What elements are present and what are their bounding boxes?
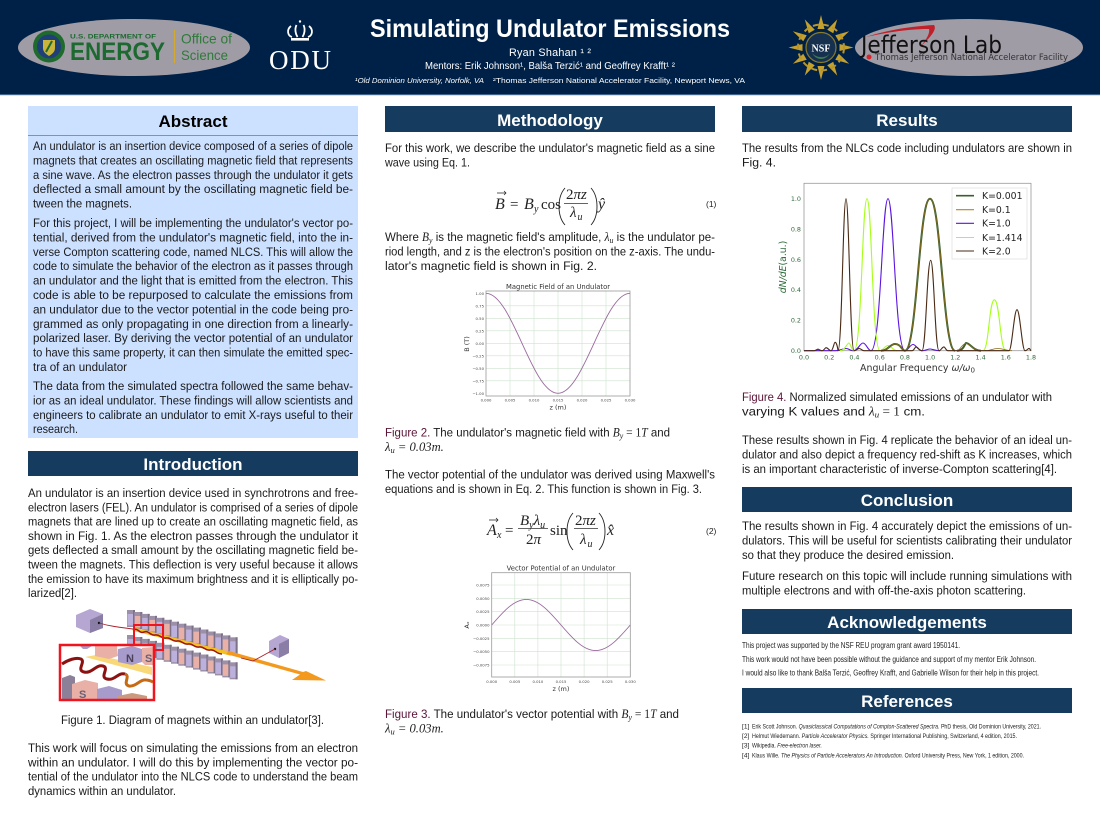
caption: figure 3: λ bbox=[385, 722, 390, 736]
text block: reference list: [2] bbox=[742, 733, 749, 740]
chart: magnetic field: 0.00 bbox=[476, 341, 485, 346]
equation 2: y bbox=[528, 520, 534, 531]
equation 1 bbox=[495, 187, 717, 225]
chart: magnetic field: −1.00 bbox=[472, 391, 485, 396]
chart: vector potential: 0.020 bbox=[579, 679, 590, 684]
text block: introduction body: shown in Fig. 1. As the electron passes through the undulator it bbox=[28, 529, 359, 543]
chart: magnetic field: 0.020 bbox=[577, 398, 588, 402]
y axis label: dN/dE(a.u.) bbox=[778, 241, 789, 293]
chart: magnetic field: z (m) bbox=[550, 404, 566, 412]
text block: introduction body bbox=[28, 486, 359, 600]
text block: undulator parameters: riod length, and z is the electron's position on the z-axis. The undu- bbox=[385, 244, 715, 258]
x ticks: 0.2 bbox=[824, 354, 834, 362]
caption: figure 3: y bbox=[628, 712, 632, 722]
text block: reference list: Helmut Wiedemann. Particle Accelerator Physics. Springer International Publishing, Switzerland, 4 edition, 2015. bbox=[752, 733, 1017, 740]
text block: conclusion body: multiple electrons and with off-the-axis photon scattering. bbox=[742, 583, 1026, 597]
legend bbox=[952, 188, 1027, 259]
text block: reference list: Klaus Wille. The Physics of Particle Accelerators An Introduction. Oxford University Press, New York, 1 edition, 2000. bbox=[752, 752, 1024, 760]
caption: figure 2: Figure 2. The undulator's magnetic field with B bbox=[385, 425, 624, 439]
text block: abstract body: tential, derived from the undulator's magnetic field, into the in- bbox=[33, 230, 353, 244]
text block: acknowledgements body bbox=[742, 640, 1039, 678]
text block: reference list: Erik Scott Johnson. Quasiclassical Computations of Compton-Scattered Spectra. PhD thesis, Old Dominion University, 2021. bbox=[752, 724, 1041, 730]
caption: figure 2: = 1 bbox=[623, 425, 641, 439]
chart: vector potential: Aₓ bbox=[463, 621, 471, 629]
text block: abstract body: magnets that creates an oscillating magnetic field that represents bbox=[33, 153, 353, 167]
x ticks: 0.0 bbox=[799, 354, 809, 362]
text block: conclusion body bbox=[742, 519, 1072, 597]
chart: vector potential: 0.000 bbox=[486, 679, 498, 684]
text block: undulator parameters: λ bbox=[604, 230, 610, 244]
legend: K=0.001 bbox=[982, 191, 1023, 202]
panel: results bbox=[742, 106, 1072, 476]
text block: methodology intro bbox=[384, 141, 715, 170]
equation 2: B bbox=[520, 513, 529, 529]
caption: figure 2: m. bbox=[432, 440, 444, 454]
equation 2: x bbox=[496, 530, 502, 541]
text block: abstract body: an undulator and the light that is emitted from the electron. This bbox=[33, 274, 353, 288]
text block: introduction body: magnets that are lined up to create an oscillating magnetic field, as bbox=[28, 515, 358, 529]
text block: undulator parameters: Where B bbox=[385, 230, 430, 244]
equation 1: u bbox=[578, 212, 582, 223]
text block: abstract body bbox=[33, 139, 353, 436]
logo: Jefferson Lab bbox=[855, 19, 1083, 76]
logo: Department of Energy Office of Science: U.S. DEPARTMENT OF bbox=[70, 34, 156, 40]
text block: results discussion: dulator and also depict a frequency red-shift as K increases, which bbox=[742, 447, 1072, 461]
y ticks: 0.2 bbox=[791, 317, 801, 325]
zoom inset: N bbox=[126, 653, 134, 665]
heading: acknowledgements bbox=[742, 609, 1072, 634]
caption: figure 3: = 1 bbox=[632, 707, 650, 721]
chart: vector potential: 0.005 bbox=[509, 679, 521, 684]
legend: K=1.414 bbox=[982, 233, 1023, 244]
chart: magnetic field: −0.50 bbox=[472, 366, 485, 371]
equation 1: λ bbox=[569, 205, 577, 221]
chart: magnetic field: −0.25 bbox=[472, 354, 485, 358]
logo: Department of Energy Office of Science bbox=[18, 19, 250, 76]
chart: magnetic field: 0.015 bbox=[553, 398, 564, 402]
curve: K=0.001 bbox=[881, 199, 981, 351]
chart: magnetic field: −0.75 bbox=[472, 378, 485, 384]
y ticks: 1.0 bbox=[791, 195, 801, 203]
text block: introduction body: electron lasers (FEL). An undulator is comprised of a series of dipole bbox=[28, 500, 358, 514]
text block: undulator parameters: y bbox=[428, 235, 433, 245]
equation 2: = bbox=[505, 523, 513, 539]
equation 1: = bbox=[510, 197, 518, 213]
text block: results discussion: These results shown in Fig. 4 replicate the behavior of an ideal un- bbox=[742, 433, 1072, 447]
caption: figure 4: varying K values and λ bbox=[742, 404, 874, 418]
equation 2: sin bbox=[550, 523, 568, 539]
chart: vector potential: 0.025 bbox=[602, 679, 613, 684]
heading: methodology: Methodology bbox=[497, 111, 603, 130]
x ticks: 1.2 bbox=[950, 354, 960, 362]
text block: abstract body: an undulator due to the vector potential in the code being pro- bbox=[33, 302, 353, 316]
text block: abstract body: to have this same property, it can then simulate the emitted spec- bbox=[33, 346, 353, 360]
grid lines bbox=[492, 573, 630, 677]
heading: references: References bbox=[861, 692, 953, 711]
chart: magnetic field: 0.005 bbox=[505, 398, 516, 402]
upper magnet row bbox=[127, 610, 238, 654]
chart: vector potential: 0.0000 bbox=[476, 622, 490, 628]
chart: magnetic field: 0.000 bbox=[481, 398, 492, 402]
mentors: Mentors: Erik Johnson¹, Balša Terzić¹ and Geoffrey Krafft¹ ² bbox=[425, 61, 676, 72]
caption: figure 2: λ bbox=[385, 440, 390, 454]
legend: K=1.0 bbox=[982, 219, 1011, 230]
curve: K=2.0 bbox=[804, 199, 1031, 351]
text block: conclusion body: The results shown in Fig. 4 accurately depict the emissions of un- bbox=[742, 519, 1072, 533]
author: Ryan Shahan ¹ ² bbox=[509, 47, 591, 59]
logo: Department of Energy Office of Science: Science bbox=[181, 47, 228, 63]
caption: figure 3: m. bbox=[432, 722, 444, 736]
legend: K=2.0 bbox=[982, 246, 1011, 257]
text block: vector potential: The vector potential of the undulator was derived using Maxwell's bbox=[385, 468, 715, 482]
caption: figure 3 bbox=[384, 707, 679, 736]
zoom frame: small bbox=[134, 625, 163, 650]
y ticks: 0.6 bbox=[791, 256, 801, 264]
zoom inset: S bbox=[145, 653, 152, 665]
chart: vector potential: 0.030 bbox=[625, 679, 636, 684]
grid lines bbox=[486, 291, 630, 396]
curve: K=1.414 bbox=[840, 199, 1006, 351]
y ticks: 0.0 bbox=[791, 347, 801, 355]
text block: abstract body: tween the magnets. bbox=[33, 197, 132, 211]
heading: abstract: Abstract bbox=[159, 112, 228, 131]
affiliations: ²Thomas Jefferson National Accelerator Facility, Newport News, VA bbox=[493, 76, 745, 85]
text block: abstract body: grammed as only propagating in one direction from a linearly- bbox=[33, 317, 353, 331]
heading: methodology bbox=[385, 106, 715, 132]
caption: figure 2: = 0.03 bbox=[395, 440, 432, 454]
legend: K=0.1 bbox=[982, 205, 1011, 216]
logo: Jefferson Lab: Thomas Jefferson National Accelerator Facility bbox=[874, 53, 1068, 63]
heading: introduction bbox=[28, 451, 358, 476]
text block: scope of work: within an undulator. I will do this by implementing the vector po- bbox=[27, 755, 358, 769]
caption: figure 3: = 0.03 bbox=[395, 722, 432, 736]
text block: vector potential bbox=[385, 468, 715, 496]
x ticks: 0.8 bbox=[900, 354, 910, 362]
logo: ODU bbox=[269, 20, 331, 75]
caption: figure 4: cm. bbox=[903, 404, 923, 418]
text block: abstract body: The data from the simulated spectra followed the same behav- bbox=[33, 379, 353, 393]
text block: conclusion body: dulators. This will be useful for scientists calibrating their undulator bbox=[742, 533, 1072, 547]
heading: conclusion bbox=[742, 487, 1072, 512]
heading: references bbox=[742, 688, 1072, 713]
text block: reference list bbox=[742, 724, 1041, 760]
y ticks: 0.4 bbox=[791, 286, 801, 294]
heading: results bbox=[742, 106, 1072, 132]
text block: undulator parameters: is the undulator pe- bbox=[613, 230, 715, 244]
caption: figure 2: T and bbox=[641, 425, 672, 439]
text block: conclusion body: so that they produce the desired emission. bbox=[742, 548, 954, 562]
text block: acknowledgements body: This project was supported by the NSF REU program grant award 1950141. bbox=[742, 640, 960, 650]
x axis label: 0 bbox=[970, 366, 975, 374]
logo: NSF bbox=[788, 15, 854, 80]
text block: methodology intro: For this work, we describe the undulator's magnetic field as a sine bbox=[385, 141, 715, 155]
text block: results discussion: is an important characteristic of inverse-Compton scattering[4]. bbox=[742, 462, 1057, 476]
x axis label: Angular Frequency ω/ω bbox=[860, 363, 970, 374]
text block: results discussion bbox=[742, 433, 1072, 476]
chart: vector potential: −0.0025 bbox=[473, 636, 490, 641]
logo: NSF: NSF bbox=[812, 44, 830, 54]
text block: undulator parameters: lator's magnetic field is shown in Fig. 2. bbox=[385, 259, 597, 273]
heading: acknowledgements: Acknowledgements bbox=[827, 613, 987, 632]
lower magnet row bbox=[127, 635, 238, 679]
heading: results: Results bbox=[876, 111, 938, 130]
chart: magnetic field: Magnetic Field of an Undulator bbox=[506, 283, 610, 291]
x ticks: 1.0 bbox=[925, 354, 935, 362]
chart: vector potential: 0.0050 bbox=[476, 596, 490, 601]
caption: figure 1: Figure 1. Diagram of magnets within an undulator[3]. bbox=[61, 713, 324, 727]
equation 1: y bbox=[533, 204, 539, 215]
caption: figure 4: u bbox=[875, 409, 879, 419]
icon: right cube bbox=[241, 635, 289, 661]
text block: reference list: [1] bbox=[742, 724, 749, 730]
caption: figure 4: = 1 bbox=[879, 404, 900, 418]
curve: K=0.1 bbox=[881, 199, 1012, 351]
text block: undulator parameters bbox=[385, 230, 715, 273]
equation 2: (2) bbox=[706, 526, 717, 536]
text block: reference list: [3] bbox=[742, 742, 749, 750]
chart: vector potential: 0.010 bbox=[532, 679, 544, 684]
caption: figure 2 bbox=[384, 425, 670, 455]
text block: scope of work: This work will focus on simulating the emissions from an electron bbox=[28, 741, 358, 755]
text block: abstract body: research. bbox=[33, 422, 78, 436]
text block: reference list: [4] bbox=[742, 752, 749, 760]
text block: introduction body: gets deflected a small amount by the oscillating magnetic field be- bbox=[28, 543, 358, 557]
equation 2: u bbox=[588, 539, 592, 550]
chart: vector potential bbox=[463, 564, 636, 693]
equation 2: 2πz bbox=[575, 513, 596, 529]
curve: K=1.0 bbox=[804, 199, 940, 351]
text block: undulator parameters: is the magnetic field's amplitude, bbox=[433, 230, 605, 244]
caption: figure 2: u bbox=[390, 445, 395, 455]
equation 1: (1) bbox=[706, 199, 717, 209]
equation 2: x̂ bbox=[606, 522, 614, 539]
chart: vector potential: −0.0075 bbox=[473, 662, 490, 668]
text block: reference list: Wikipedia. Free-electron laser. bbox=[752, 742, 822, 750]
equation 2: λ bbox=[533, 513, 541, 529]
x ticks bbox=[799, 354, 1036, 362]
text block: abstract body: polarized laser. By deriving the vector potential of an undulator bbox=[33, 331, 353, 345]
logo: Department of Energy Office of Science: Office of bbox=[181, 30, 232, 46]
chart: magnetic field: 0.025 bbox=[601, 398, 612, 402]
x ticks: 1.4 bbox=[976, 354, 986, 362]
chart: simulated emissions bbox=[778, 183, 1036, 374]
grid frame bbox=[804, 183, 1031, 351]
panel: abstract bbox=[28, 106, 358, 438]
text block: introduction body: tween the magnets. This deflection is very useful because it allows bbox=[28, 558, 358, 572]
text block: undulator parameters: u bbox=[610, 235, 613, 245]
chart: magnetic field: B (T) bbox=[463, 336, 471, 352]
text block: results intro: The results from the NLCs code including undulators are shown in bbox=[742, 141, 1072, 155]
chart: magnetic field: 0.010 bbox=[529, 398, 540, 402]
zoom inset: S bbox=[79, 689, 86, 701]
text block: abstract body: a sine wave. As the electron passes through the undulator it gets bbox=[33, 168, 353, 182]
logo: Jefferson Lab: Jefferson Lab bbox=[859, 31, 1002, 59]
text block: introduction body: the emission to have its maximum brightness and it is elliptically po- bbox=[28, 572, 358, 586]
header banner bbox=[0, 0, 1100, 95]
text block: abstract body: ior as an ideal undulator. These findings will allow scientists and bbox=[33, 393, 353, 407]
text block: abstract body: code to simulate the behavior of the electron as it passes through bbox=[33, 259, 353, 273]
heading: conclusion: Conclusion bbox=[861, 491, 953, 510]
equation 2: A bbox=[486, 522, 497, 539]
x ticks: 0.4 bbox=[849, 354, 859, 362]
chart: vector potential: Vector Potential of an Undulator bbox=[507, 564, 616, 572]
equation 2 bbox=[486, 513, 717, 550]
text block: abstract body: code is able to be repurposed to calculate the emissions from bbox=[33, 288, 353, 302]
equation 1: 2πz bbox=[566, 187, 587, 203]
title: Simulating Undulator Emissions bbox=[370, 15, 730, 43]
text block: abstract body: deflected a small amount by the oscillating magnetic field be- bbox=[33, 182, 353, 196]
affiliations: ¹Old Dominion University, Norfolk, VA bbox=[355, 76, 484, 85]
chart: magnetic field bbox=[463, 283, 636, 412]
text block: methodology intro: wave using Eq. 1. bbox=[384, 156, 470, 170]
arrow: emitted radiation bbox=[226, 651, 326, 680]
equation 1: cos bbox=[541, 197, 561, 213]
chart: magnetic field: 0.75 bbox=[476, 304, 485, 308]
equation 1: ŷ bbox=[596, 196, 606, 213]
text block: scope of work bbox=[27, 741, 358, 798]
logo: Department of Energy Office of Science: ENERGY bbox=[70, 38, 165, 66]
panel: methodology bbox=[384, 106, 717, 736]
text block: vector potential: equations and is shown in Eq. 2. This function is shown in Fig. 3. bbox=[385, 482, 702, 496]
panel: introduction bbox=[27, 451, 359, 798]
equation 2: λ bbox=[579, 532, 587, 548]
text block: conclusion body: Future research on this topic will include running simulations with bbox=[742, 569, 1072, 583]
text block: results intro: Fig. 4. bbox=[742, 156, 776, 170]
text block: scope of work: dynamics within an undulator. bbox=[28, 784, 176, 798]
panel: references bbox=[742, 688, 1072, 760]
caption: figure 3: u bbox=[390, 726, 395, 736]
text block: results intro bbox=[742, 141, 1072, 170]
figure 1: undulator diagram bbox=[60, 609, 326, 701]
x ticks: 0.6 bbox=[875, 354, 885, 362]
text block: introduction body: An undulator is an insertion device used in synchrotrons and free- bbox=[28, 486, 358, 500]
caption: figure 3: Figure 3. The undulator's vector potential with B bbox=[385, 707, 632, 721]
chart: vector potential: z (m) bbox=[553, 685, 569, 693]
chart: magnetic field: 0.50 bbox=[476, 316, 485, 321]
zoom inset bbox=[60, 645, 154, 701]
icon: left cube bbox=[76, 609, 133, 633]
text block: abstract body: verse Compton scattering code, named NLCS. This will allow the bbox=[33, 245, 353, 259]
text block: abstract body: engineers to calibrate an undulator to emit X-rays useful to their bbox=[33, 408, 353, 422]
x ticks: 1.8 bbox=[1026, 354, 1036, 362]
text block: abstract body: tra of an undulator bbox=[33, 360, 127, 374]
heading: introduction: Introduction bbox=[143, 455, 243, 474]
chart: magnetic field: 1.00 bbox=[476, 291, 485, 296]
chart: magnetic field: 0.030 bbox=[625, 398, 636, 402]
caption: figure 3: T and bbox=[650, 707, 681, 721]
electron beam bbox=[133, 629, 231, 654]
chart: vector potential: 0.0075 bbox=[476, 582, 490, 588]
x ticks: 1.6 bbox=[1001, 354, 1011, 362]
text block: scope of work: tential of the undulator into the NLCS code to understand the beam bbox=[28, 770, 358, 784]
caption: figure 2: y bbox=[619, 430, 624, 440]
text block: introduction body: larized[2]. bbox=[28, 586, 77, 600]
chart: magnetic field: 0.25 bbox=[476, 328, 485, 334]
equation 2: u bbox=[540, 520, 545, 531]
equation 1: B bbox=[524, 196, 534, 213]
chart: vector potential: 0.015 bbox=[556, 679, 567, 684]
logo: ODU: ODU bbox=[269, 45, 331, 75]
text block: abstract body: For this project, I will be implementing the undulator's vector po- bbox=[33, 216, 353, 230]
caption: figure 4: Figure 4. Normalized simulated emissions of an undulator with bbox=[742, 390, 1052, 404]
panel: acknowledgements bbox=[742, 609, 1072, 678]
chart: vector potential: −0.0050 bbox=[473, 649, 490, 654]
chart: vector potential: 0.0025 bbox=[476, 609, 490, 614]
equation 1: B bbox=[495, 196, 505, 213]
y ticks bbox=[791, 195, 801, 355]
y ticks: 0.8 bbox=[791, 225, 801, 233]
affiliations bbox=[355, 76, 745, 85]
caption: figure 4 bbox=[742, 390, 1052, 419]
panel: conclusion bbox=[742, 487, 1072, 597]
text block: abstract body: An undulator is an insertion device composed of a series of dipole bbox=[33, 139, 353, 153]
equation 2: 2π bbox=[526, 532, 542, 548]
